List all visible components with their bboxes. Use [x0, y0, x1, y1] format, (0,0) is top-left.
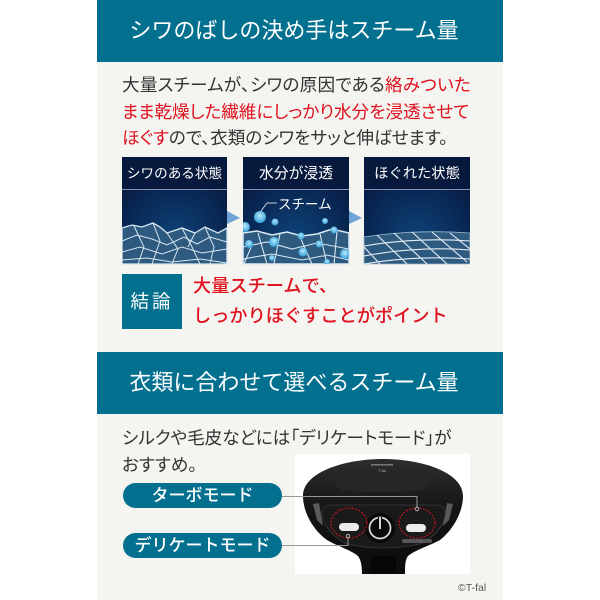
- arrow: second step: [349, 211, 362, 224]
- icon: power button: [365, 513, 395, 543]
- diagram: three fibre states: [122, 157, 470, 265]
- text block: delicate mode note: [122, 428, 452, 474]
- icon: steam droplets: [240, 211, 350, 265]
- connector: mode leader lines: [282, 496, 420, 546]
- label: turbo mode: ターボモード: [152, 486, 254, 505]
- badge: conclusion: [122, 274, 182, 329]
- text block: delicate mode note: シルクや毛皮などには「デリケートモード」が: [122, 428, 451, 448]
- text block: conclusion: [193, 276, 448, 326]
- text block: explanation: ほぐすので、衣類のシワをサッと伸ばせます。: [122, 128, 448, 148]
- label: loosened state: ほぐれた状態: [374, 165, 460, 182]
- panel: background: [97, 0, 503, 600]
- panel: loosened state: [364, 157, 470, 264]
- label: turbo mode: [123, 483, 282, 508]
- label: delicate mode: [123, 533, 282, 558]
- text block: explanation: まま乾燥した繊維にしっかり水分を浸透させて: [122, 102, 469, 122]
- arrow: first step: [227, 211, 240, 224]
- label: wrinkled state: シワのある状態: [127, 166, 222, 181]
- label: water soaking: 水分が浸透: [259, 165, 333, 182]
- label: delicate mode: デリケートモード: [134, 536, 270, 555]
- heading: selectable steam: [97, 352, 503, 414]
- icon: delicate mode button: [331, 508, 367, 538]
- panel: wrinkled state: [122, 157, 227, 264]
- label: steam: スチーム: [278, 197, 332, 212]
- product photo: steamer control head: [295, 454, 470, 574]
- badge: conclusion: 結論: [130, 291, 174, 312]
- text block: conclusion: しっかりほぐすことがポイント: [193, 306, 448, 326]
- icon: turbo mode button: [399, 508, 435, 538]
- text block: explanation: 大量スチームが、シワの原因である絡みついた: [122, 75, 471, 95]
- heading: selectable steam: 衣類に合わせて選べるスチーム量: [129, 370, 459, 395]
- panel: water soaking: [240, 157, 350, 265]
- credit: ©T-fal: [458, 582, 486, 594]
- text block: delicate mode note: おすすめ。: [122, 454, 197, 474]
- text block: explanation: [122, 75, 471, 148]
- heading: steam amount: シワのばしの決め手はスチーム量: [129, 18, 459, 43]
- product photo: steamer control head: T-fal: [378, 468, 386, 473]
- text block: conclusion: 大量スチームで、: [193, 276, 337, 296]
- heading: steam amount: [97, 0, 503, 62]
